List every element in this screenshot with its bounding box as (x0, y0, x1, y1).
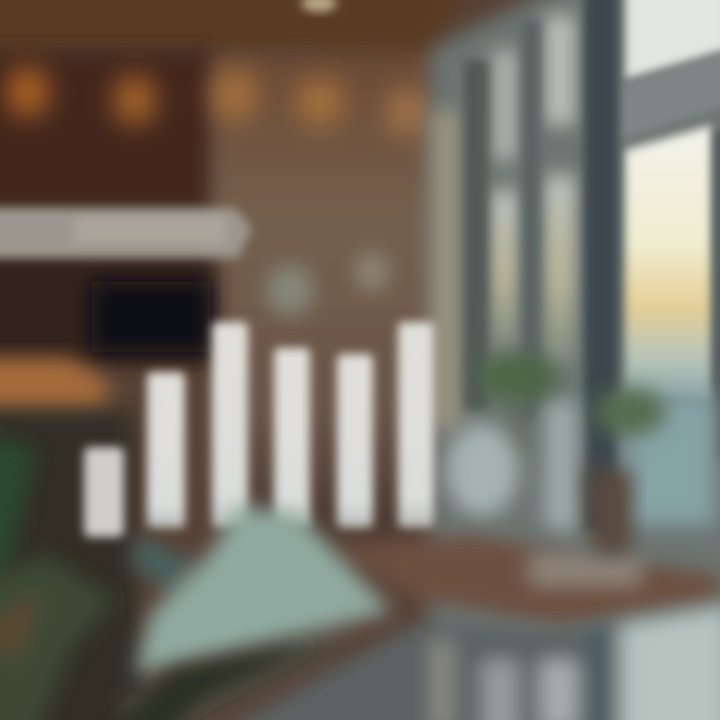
lower left dark area (0, 412, 150, 720)
mint sofa (120, 505, 392, 720)
reflective floor (190, 600, 720, 720)
upper left dark wall (0, 50, 215, 210)
plant: window plants (478, 354, 666, 455)
window base planter (585, 470, 632, 555)
television screen (92, 282, 210, 352)
wood coffee table (335, 535, 720, 625)
wall downlights (6, 66, 430, 136)
centre wood wall (212, 55, 437, 535)
window wall (430, 0, 720, 720)
window cross beam (620, 50, 720, 140)
upper window sky (625, 0, 720, 80)
white horizontal band (0, 208, 252, 258)
dark media wall (0, 255, 215, 365)
lower window glow (545, 395, 715, 530)
ceiling light (301, 0, 337, 12)
plant: foreground leaves (0, 430, 320, 720)
white columns (84, 322, 434, 537)
sunlit window (625, 125, 712, 400)
orange lit counter (0, 358, 112, 408)
ceiling (0, 0, 480, 60)
dark window mullions (464, 0, 720, 530)
glass vases (266, 252, 518, 516)
window panes (432, 15, 575, 430)
